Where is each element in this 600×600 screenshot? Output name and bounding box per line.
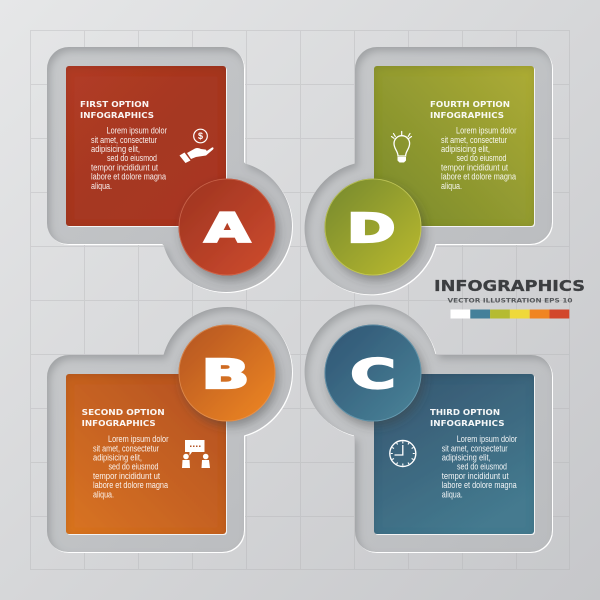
color card C: [374, 374, 535, 535]
body text B: sit amet, consectetur: [93, 443, 159, 453]
badge B: B: [202, 352, 250, 398]
badge A: [178, 178, 276, 276]
body text C: aliqua.: [442, 490, 463, 500]
body text D: labore et dolore magna: [441, 172, 516, 182]
body text B: Lorem ipsum dolor: [108, 434, 169, 444]
icon: light bulb: [392, 132, 412, 162]
heading C: THIRD OPTION: [430, 408, 500, 417]
body text C: Lorem ipsum dolor: [457, 434, 517, 444]
body text C: [442, 434, 517, 500]
body text A: [91, 126, 167, 191]
heading A: INFOGRAPHICS: [80, 111, 154, 120]
icon: hand with coin: [180, 129, 214, 163]
body text D: sit amet, consectetur: [441, 135, 507, 145]
color card A: [66, 66, 227, 227]
body text B: labore et dolore magna: [93, 480, 168, 490]
body text A: Lorem ipsum dolor: [106, 126, 167, 136]
body text A: adipisicing elit,: [91, 144, 140, 154]
color card B: [66, 374, 227, 535]
heading D: [430, 100, 510, 120]
heading A: [80, 100, 154, 120]
panel: C third option: [305, 305, 553, 553]
heading C: INFOGRAPHICS: [430, 419, 504, 428]
body text C: sit amet, consectetur: [442, 443, 508, 453]
title: INFOGRAPHICS: [434, 277, 585, 295]
heading B: INFOGRAPHICS: [82, 419, 156, 428]
body text A: sed do eiusmod: [107, 153, 157, 163]
body text B: tempor incididunt ut: [93, 471, 160, 481]
heading D: INFOGRAPHICS: [430, 111, 504, 120]
color card D: [374, 66, 535, 227]
heading C: [430, 408, 504, 428]
heading D: FOURTH OPTION: [430, 100, 510, 109]
body text A: tempor incididunt ut: [91, 162, 158, 172]
body text C: sed do eiusmod: [457, 462, 507, 472]
icon: two people talking: [182, 440, 210, 468]
heading A: FIRST OPTION: [80, 100, 149, 109]
subtitle: VECTOR ILLUSTRATION EPS 10: [448, 298, 573, 304]
body text C: tempor incididunt ut: [442, 471, 509, 481]
body text D: tempor incididunt ut: [441, 162, 508, 172]
body text C: adipisicing elit,: [442, 452, 491, 462]
body text A: aliqua.: [91, 181, 112, 191]
frame D: [305, 47, 553, 295]
panel: D fourth option: [305, 47, 553, 295]
body text D: aliqua.: [441, 181, 462, 191]
body text D: adipisicing elit,: [441, 144, 490, 154]
badge D: D: [347, 206, 396, 252]
body text D: Lorem ipsum dolor: [456, 126, 517, 136]
panel: B second option: [47, 307, 293, 553]
badge C: C: [350, 352, 396, 398]
frame C: [305, 305, 553, 553]
body text B: [93, 434, 169, 500]
body text C: labore et dolore magna: [442, 480, 517, 490]
badge A: A: [204, 206, 250, 252]
heading B: [82, 408, 165, 428]
body text B: aliqua.: [93, 490, 114, 500]
badge C: [324, 324, 422, 422]
frame B: [47, 307, 293, 553]
title block: [434, 277, 585, 318]
body text D: sed do eiusmod: [456, 153, 506, 163]
frame A: [47, 47, 293, 293]
body text A: labore et dolore magna: [91, 172, 166, 182]
badge B: [178, 324, 276, 422]
body text D: [441, 126, 517, 191]
icon: hand with coin: $: [198, 131, 203, 141]
heading B: SECOND OPTION: [82, 408, 165, 417]
body text B: adipisicing elit,: [93, 452, 142, 462]
body text B: sed do eiusmod: [108, 462, 158, 472]
panel: A first option: [47, 47, 293, 293]
body text A: sit amet, consectetur: [91, 135, 157, 145]
icon: clock: [390, 440, 416, 466]
badge D: [324, 178, 422, 276]
colour swatches: [450, 310, 569, 318]
